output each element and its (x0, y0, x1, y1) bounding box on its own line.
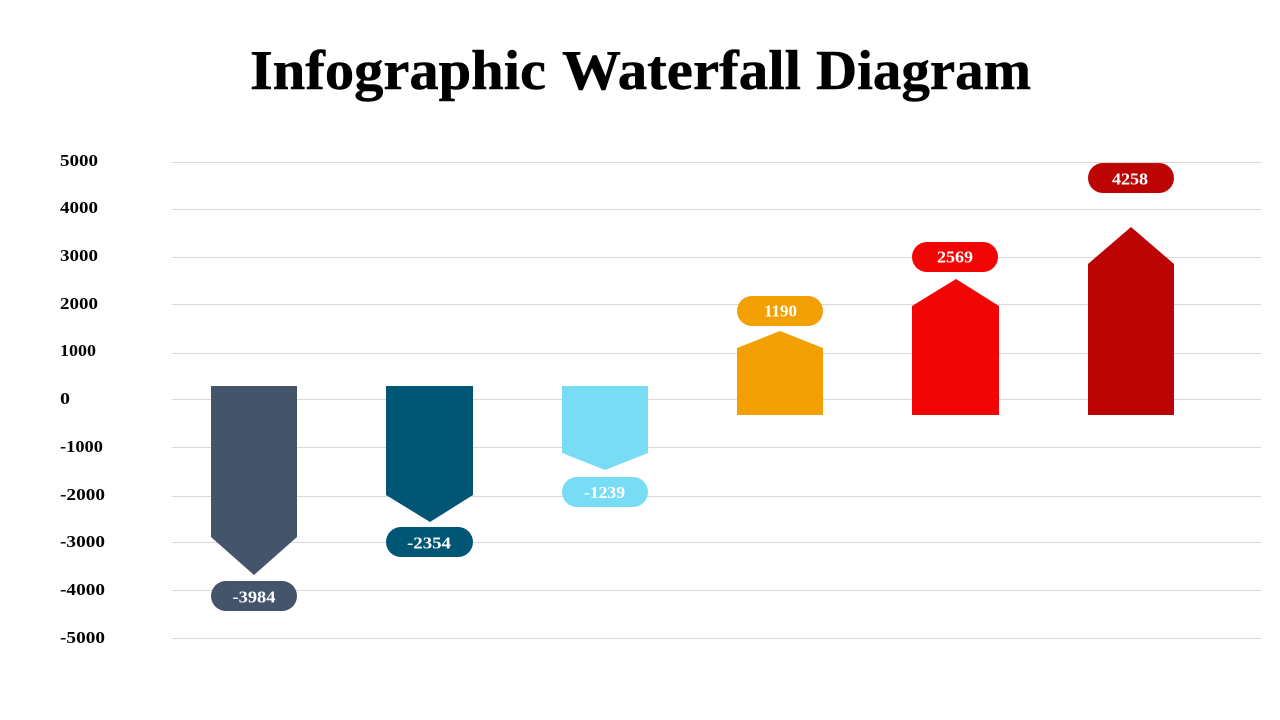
bar: -2354: -2354 (407, 534, 452, 552)
y axis labels: 3000 (60, 246, 98, 265)
title: Diagram (816, 40, 1031, 102)
y axis labels: -1000 (60, 437, 103, 456)
title: Infographic (250, 40, 546, 102)
bar: 1190: 1190 (764, 302, 797, 320)
y axis labels: 5000 (60, 151, 98, 170)
y axis labels: 1000 (60, 341, 96, 360)
y axis labels: 2000 (60, 294, 98, 313)
title: Waterfall (562, 40, 801, 102)
bar: -3984 (211, 386, 297, 611)
y axis labels: -5000 (60, 628, 105, 647)
y axis labels: -4000 (60, 580, 105, 599)
y axis labels: -3000 (60, 532, 105, 551)
bar: -3984: -3984 (232, 588, 276, 606)
y axis labels (60, 151, 105, 647)
y axis labels: -2000 (60, 485, 105, 504)
bar: -1239: -1239 (584, 483, 625, 502)
bar: -1239 (562, 386, 648, 507)
bar: 1190 (737, 296, 823, 415)
bar: 4258: 4258 (1112, 170, 1148, 188)
bar: 4258 (1088, 163, 1174, 415)
bar: -2354 (386, 386, 473, 557)
y axis labels: 4000 (60, 198, 98, 217)
y axis labels: 0 (60, 389, 70, 408)
bar: 2569: 2569 (937, 248, 973, 266)
bar: 2569 (912, 242, 999, 415)
